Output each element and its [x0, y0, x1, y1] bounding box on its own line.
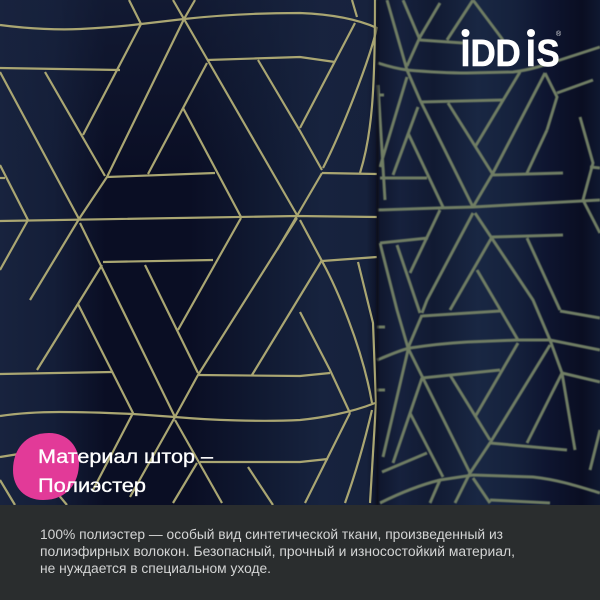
logo: IDDIS: ® — [556, 30, 562, 38]
panel: description bar — [0, 505, 600, 600]
pattern: gold geometric lines, left fold — [0, 0, 377, 505]
description text: полиэфирных волокон. Безопасный, прочный и износостойкий материал, — [40, 544, 515, 559]
logo: IDDIS: IDDIS — [461, 32, 560, 74]
title: Материал штор – — [38, 447, 213, 468]
pattern: muted green geometric lines, right fold — [377, 0, 600, 503]
pink blob accent — [13, 433, 79, 500]
panel: right curtain fold — [377, 0, 600, 505]
description text: не нуждается в специальном уходе. — [40, 561, 271, 576]
title: Полиэстер — [38, 476, 146, 497]
panel: left curtain fold — [0, 0, 378, 505]
description text: 100% полиэстер — особый вид синтетической ткани, произведенный из — [40, 527, 503, 542]
seam shadow between folds — [376, 0, 379, 505]
title — [38, 447, 213, 497]
description text — [40, 527, 515, 576]
